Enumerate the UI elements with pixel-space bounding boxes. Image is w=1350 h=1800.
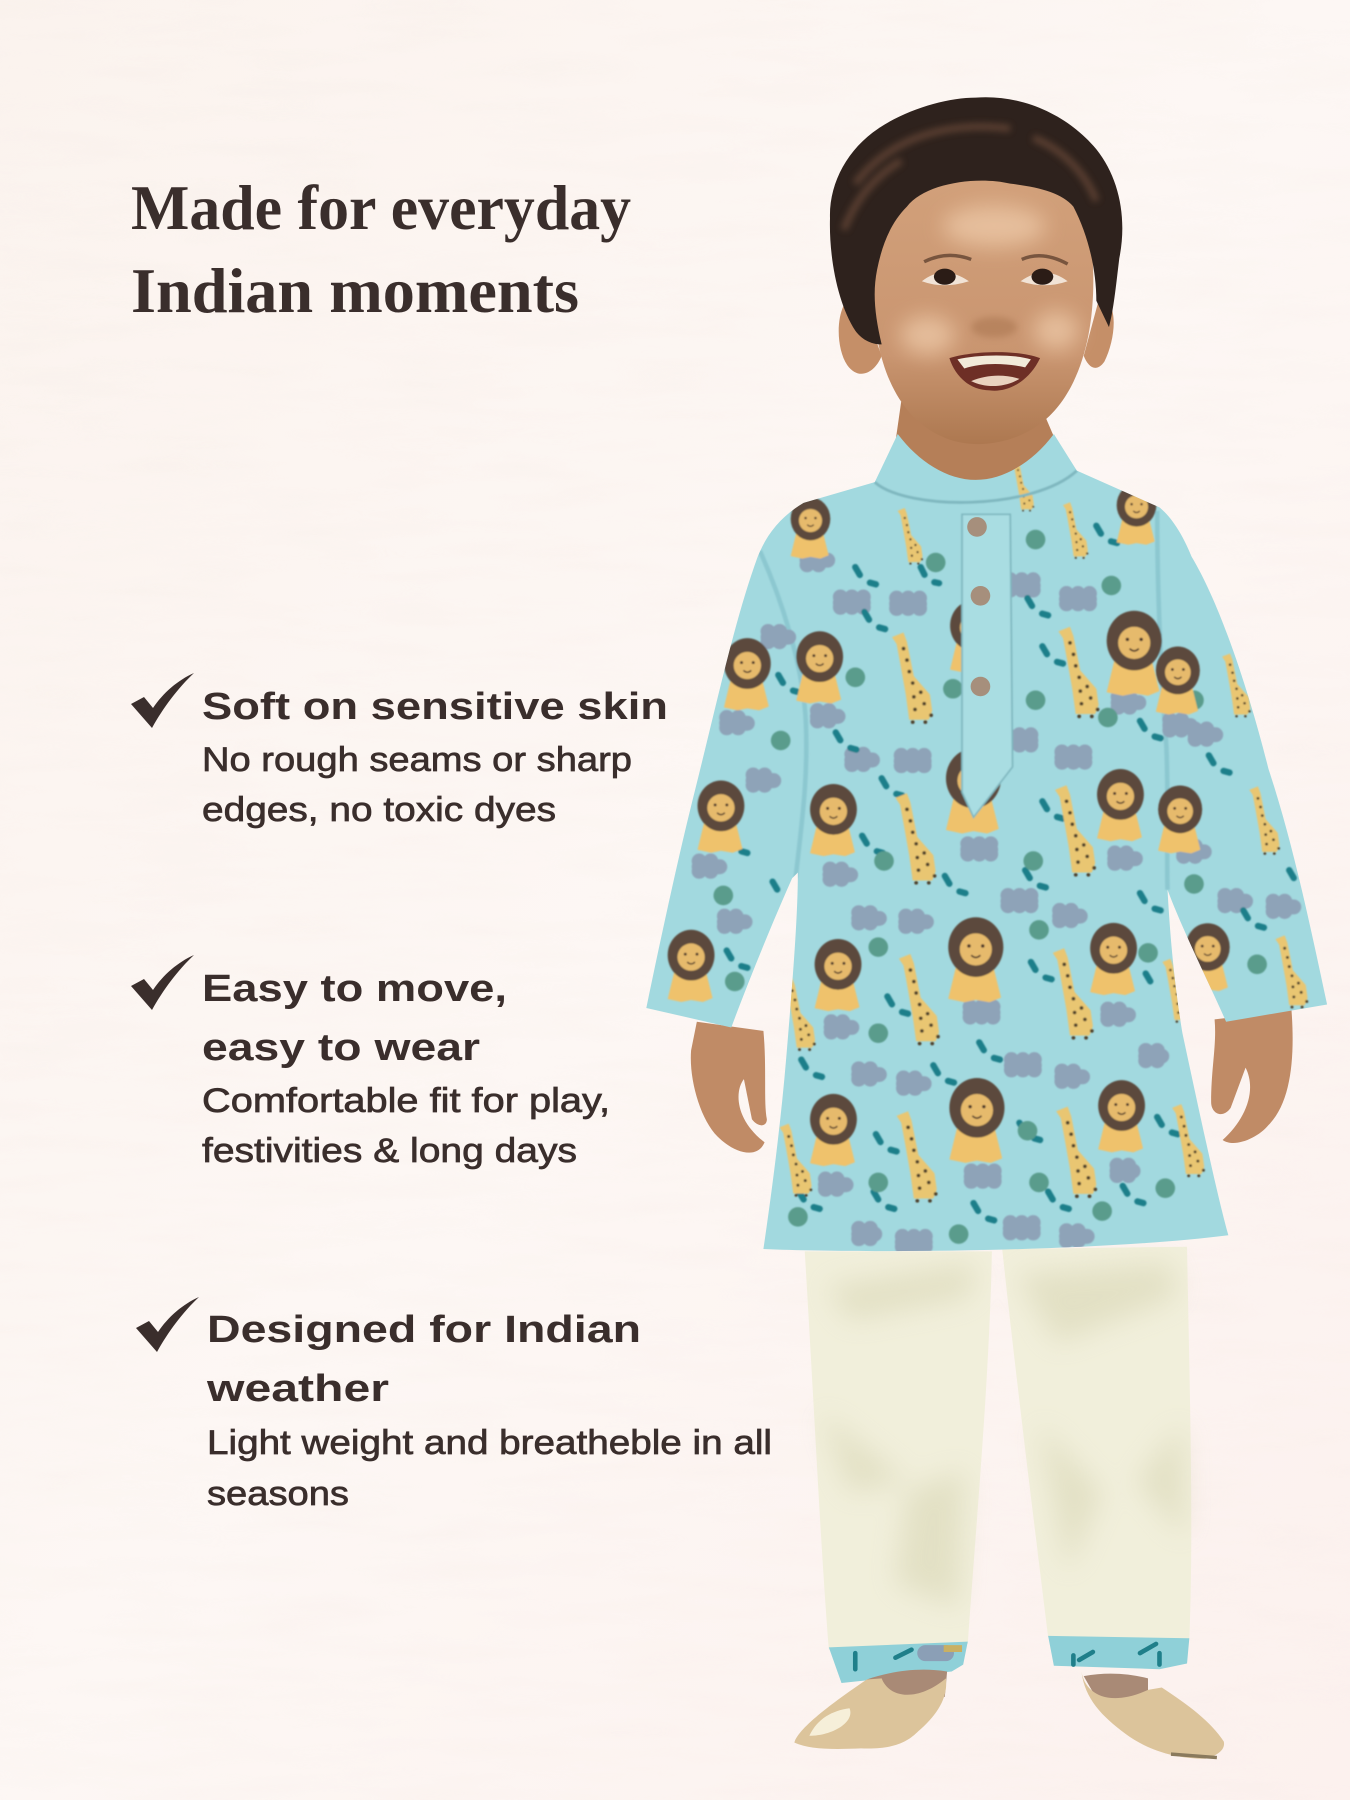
feature: designed for Indian weather: weather <box>206 1368 389 1410</box>
kurta with animal print <box>646 434 1327 1251</box>
feature: designed for Indian weather: Light weight and breatheble in all <box>207 1424 772 1462</box>
feature: easy to move, easy to wear: Easy to move, <box>202 968 507 1010</box>
title <box>131 172 631 326</box>
feature: designed for Indian weather: seasons <box>207 1475 349 1513</box>
title: Indian moments <box>131 255 579 326</box>
giraffes <box>779 461 1308 1201</box>
clouds <box>699 554 1294 1247</box>
clovers <box>723 540 1257 1234</box>
eyes <box>922 269 1068 285</box>
feature: soft on sensitive skin: edges, no toxic dyes <box>202 791 556 829</box>
hair <box>830 97 1122 344</box>
nose <box>971 317 1017 338</box>
eyebrows <box>924 255 1068 264</box>
feature: designed for Indian weather <box>136 1297 772 1513</box>
title: Made for everyday <box>131 172 631 243</box>
feature: designed for Indian weather: Designed for Indian <box>207 1309 641 1351</box>
smile <box>949 352 1040 391</box>
feature: soft on sensitive skin <box>131 673 668 829</box>
pants <box>805 1247 1191 1683</box>
right hand <box>1211 1010 1293 1143</box>
cheek and forehead highlights <box>900 205 1079 355</box>
face <box>874 149 1093 444</box>
child figure wearing kurta <box>646 97 1327 1759</box>
ears <box>839 293 1114 374</box>
print pattern <box>668 461 1308 1247</box>
icon: check mark <box>131 673 194 728</box>
placket <box>962 514 1013 817</box>
head <box>830 97 1122 444</box>
lions <box>668 484 1230 1166</box>
shoes <box>794 1670 1224 1759</box>
kurta buttons <box>977 527 981 687</box>
feature: easy to move, easy to wear: Comfortable fit for play, <box>202 1082 610 1120</box>
icon: check mark <box>136 1297 199 1352</box>
feature: soft on sensitive skin: Soft on sensitive skin <box>202 686 668 728</box>
left hand <box>691 1022 767 1153</box>
neck <box>895 402 1056 488</box>
feature: easy to move, easy to wear <box>131 955 610 1170</box>
leaves <box>727 526 1297 1220</box>
feature: easy to move, easy to wear: festivities & long days <box>202 1132 577 1170</box>
feature: soft on sensitive skin: No rough seams or sharp <box>202 741 632 779</box>
feature: easy to move, easy to wear: easy to wear <box>202 1027 480 1069</box>
icon: check mark <box>131 955 194 1010</box>
